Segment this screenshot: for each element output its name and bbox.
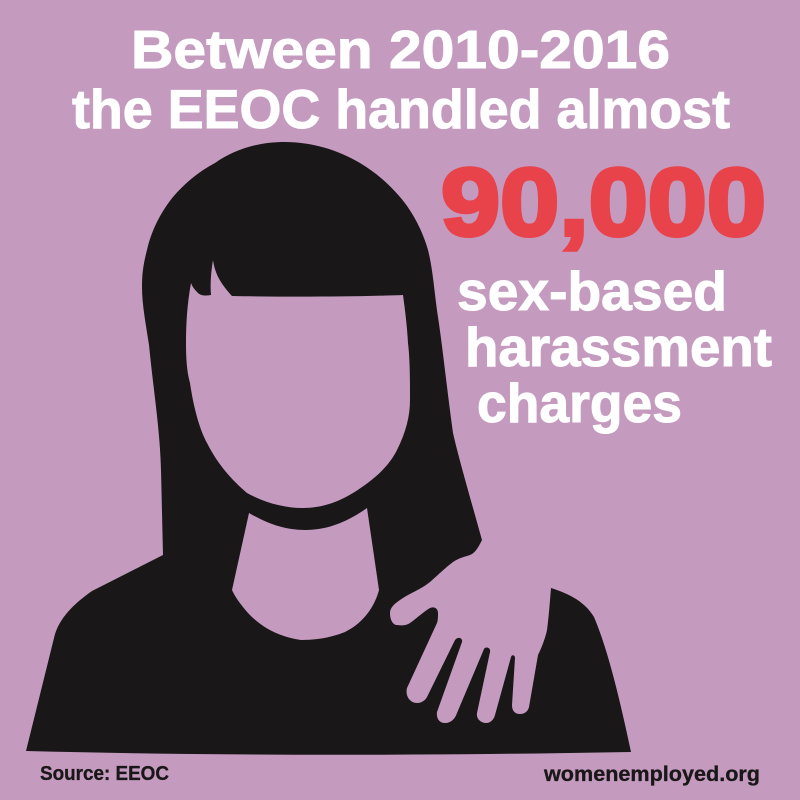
source label: Source: EEOC (40, 763, 169, 785)
title (72, 20, 730, 140)
statistic: 90,000: 90,000 (441, 149, 766, 256)
title: the EEOC handled almost (72, 78, 730, 140)
website label: womenemployed.org (543, 763, 760, 786)
statistic caption: sex-based (457, 260, 727, 322)
neck (232, 508, 379, 640)
illustration: woman silhouette with hand on shoulder (26, 142, 631, 755)
statistic caption: charges (477, 372, 682, 434)
statistic caption: harassment (465, 316, 772, 378)
hair and body silhouette (26, 142, 631, 755)
title: Between 2010-2016 (131, 20, 670, 80)
hand (390, 540, 551, 723)
statistic caption (457, 260, 772, 434)
face (186, 260, 410, 508)
